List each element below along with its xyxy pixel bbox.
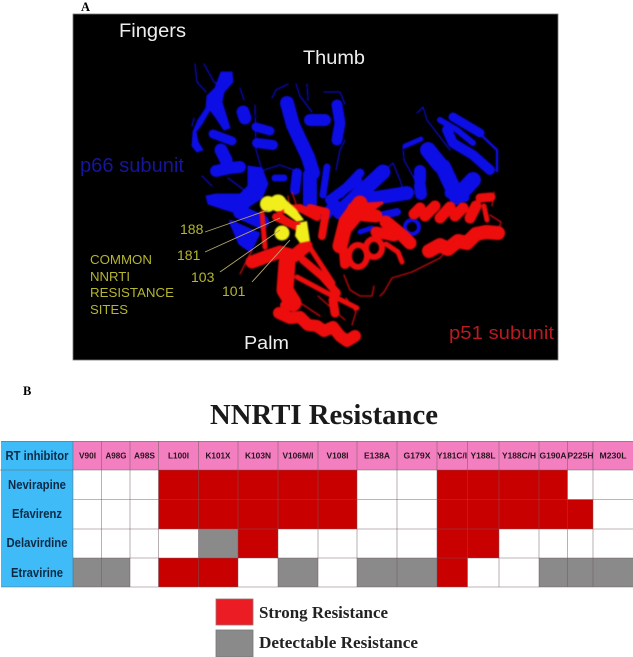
- title: NNRTI Resistance: NNRTI Resistance: [210, 399, 438, 431]
- panel label B: B: [23, 384, 31, 398]
- label: common NNRTI resistance sites: SITES: [90, 302, 128, 317]
- table white body: [73, 470, 633, 587]
- row labels: RT inhibitor: [6, 449, 69, 463]
- strong resistance cells: [158, 470, 593, 587]
- column headers: K103N: [245, 450, 271, 460]
- table header row: [73, 441, 633, 470]
- table grid lines: [0, 441, 633, 587]
- leader lines to resistance sites: [205, 210, 290, 282]
- red thin loops: [240, 192, 501, 325]
- panel A: protein structure image: [73, 14, 558, 360]
- column headers: M230L: [600, 450, 626, 460]
- legend swatch: detectable resistance: [216, 630, 253, 657]
- label: residue numbers: 181: [177, 247, 201, 263]
- row labels: Etravirine: [11, 566, 63, 580]
- legend swatch: strong resistance: [216, 599, 253, 625]
- column headers: A98G: [106, 450, 127, 460]
- label: p51 subunit: p51 subunit: [449, 323, 554, 343]
- row labels: Nevirapine: [8, 478, 66, 492]
- label: residue numbers: 188: [180, 221, 204, 237]
- column headers: G190A: [540, 450, 566, 460]
- column headers: V106M/I: [282, 450, 314, 460]
- column headers: Y188L: [470, 450, 496, 460]
- column headers: Y188C/H: [502, 450, 536, 460]
- label: p66 subunit: p66 subunit: [80, 155, 184, 177]
- column headers: [79, 450, 626, 460]
- red palm: [280, 208, 317, 217]
- label: common NNRTI resistance sites: [90, 252, 174, 317]
- table row label column: [1, 441, 73, 587]
- column headers: V90I: [79, 450, 96, 460]
- legend: [216, 599, 418, 657]
- detectable resistance cells: [73, 529, 633, 587]
- blue central mass: [206, 166, 268, 214]
- row labels: Delavirdine: [6, 536, 68, 550]
- red upper helix: [414, 197, 491, 220]
- label: common NNRTI resistance sites: RESISTANCE: [90, 285, 174, 300]
- red lower helix: [429, 232, 498, 251]
- row labels: Efavirenz: [12, 507, 62, 521]
- label: Thumb: Thumb: [303, 48, 365, 69]
- label: common NNRTI resistance sites: NNRTI: [90, 269, 130, 284]
- label: Palm: Palm: [244, 332, 289, 353]
- label: residue numbers: 101: [222, 283, 246, 299]
- protein: p51 subunit in red: [240, 192, 501, 341]
- column headers: P225H: [568, 450, 594, 460]
- column headers: V108I: [326, 450, 348, 460]
- panel label A: A: [81, 0, 90, 14]
- protein: p66 subunit in blue: [192, 64, 497, 250]
- column headers: L100I: [168, 450, 189, 460]
- column headers: Y181C/I: [437, 450, 467, 460]
- label: residue numbers: 103: [191, 269, 215, 285]
- legend text: detectable resistance: Detectable Resistance: [259, 633, 418, 652]
- column headers: G179X: [404, 450, 431, 460]
- red strand over yellow sites: [278, 212, 300, 224]
- column headers: K101X: [206, 450, 231, 460]
- blue thin loops: [192, 64, 450, 196]
- row labels: [6, 449, 69, 580]
- resistance table: [0, 441, 633, 587]
- blue fingers domain: [192, 72, 233, 152]
- legend text: strong resistance: Strong Resistance: [259, 603, 388, 622]
- blue right domain: [428, 150, 440, 165]
- label: common NNRTI resistance sites: COMMON: [90, 252, 152, 267]
- label: residue numbers: [177, 221, 246, 299]
- protein: yellow resistance site atoms: [260, 194, 310, 243]
- label: Fingers: Fingers: [119, 21, 186, 42]
- blue thumb domain: [287, 103, 313, 173]
- column headers: A98S: [134, 450, 155, 460]
- column headers: E138A: [364, 450, 390, 460]
